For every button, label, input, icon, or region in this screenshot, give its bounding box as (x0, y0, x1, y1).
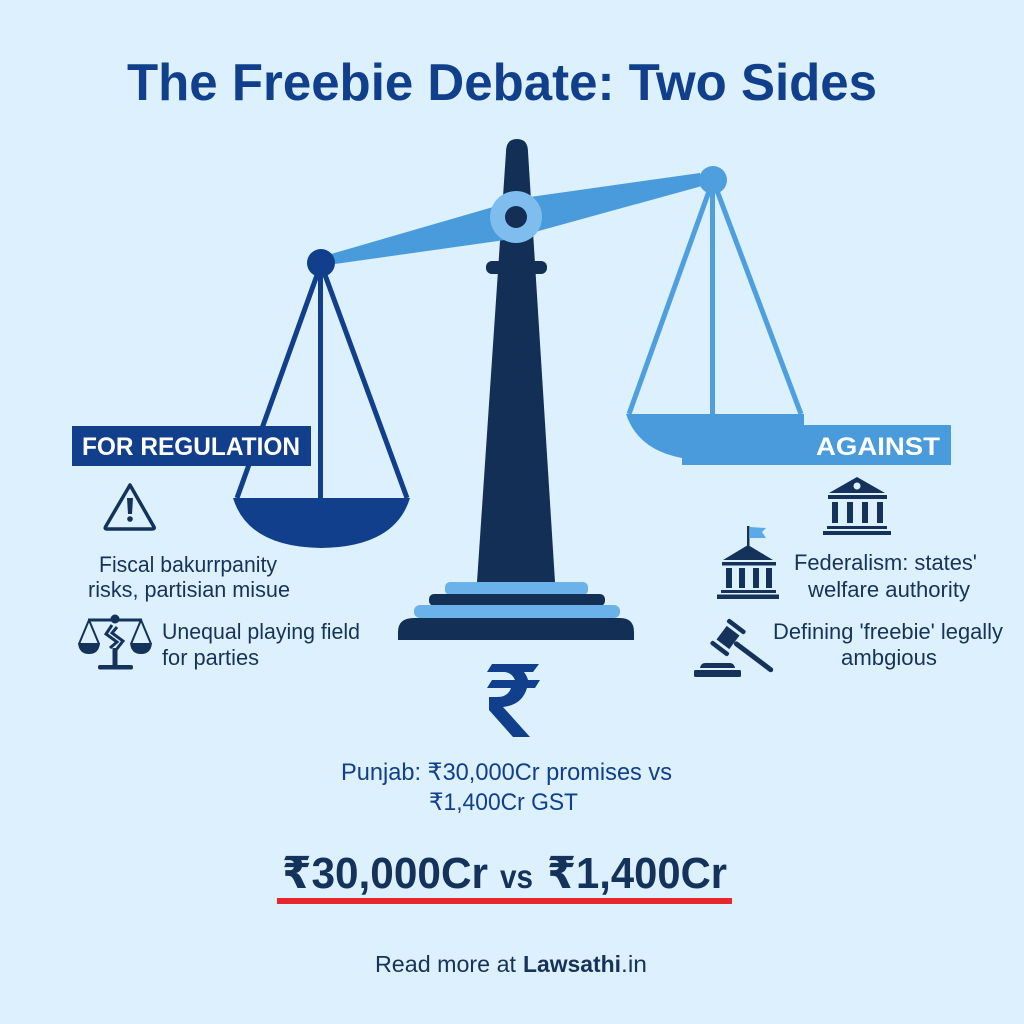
left scale pan: for regulation (233, 249, 410, 548)
text: defining freebie: ambgious (841, 645, 937, 670)
footer (375, 951, 647, 977)
icon: court building top (823, 477, 891, 535)
text: defining freebie (773, 619, 1003, 670)
scale tower (398, 139, 634, 640)
text: fiscal risks: risks, partisian misue (88, 577, 290, 602)
text: punjab comparison: ₹1,400Cr GST (429, 789, 578, 816)
text: defining freebie: Defining 'freebie' legally (773, 619, 1003, 644)
footer: Read more at (375, 951, 517, 977)
footer: Lawsathi (523, 951, 621, 977)
headline figures: ₹1,400Cr (547, 849, 727, 898)
label: for regulation (72, 426, 311, 466)
footer: .in (621, 951, 647, 977)
text: unequal playing field (162, 619, 360, 670)
label: for regulation: FOR REGULATION (82, 433, 300, 461)
icon: rupee symbol (487, 664, 540, 737)
label: against: AGAINST (816, 433, 940, 461)
text: federalism: Federalism: states' (794, 550, 977, 575)
headline figures (282, 849, 727, 898)
title: The Freebie Debate: Two Sides (127, 54, 877, 112)
balance beam (331, 173, 702, 264)
text: punjab comparison (341, 759, 672, 816)
icon: warning (105, 485, 154, 529)
text: federalism: welfare authority (807, 577, 970, 602)
headline figures: vs (500, 858, 533, 895)
text: federalism (794, 550, 977, 602)
icon: broken scales (78, 614, 152, 670)
right scale pan: against (626, 166, 804, 465)
red underline (277, 898, 732, 904)
text: fiscal risks (88, 552, 290, 602)
text: fiscal risks: Fiscal bakurrpanity (99, 552, 277, 577)
beam pivot (490, 191, 542, 243)
icon: gavel (694, 618, 782, 684)
label: against (800, 425, 951, 465)
text: unequal playing field: for parties (162, 645, 259, 670)
headline figures: ₹30,000Cr (282, 849, 488, 898)
text: punjab comparison: Punjab: ₹30,000Cr promises vs (341, 759, 672, 786)
icon: government building with flag (717, 526, 779, 599)
text: unequal playing field: Unequal playing field (162, 619, 360, 644)
